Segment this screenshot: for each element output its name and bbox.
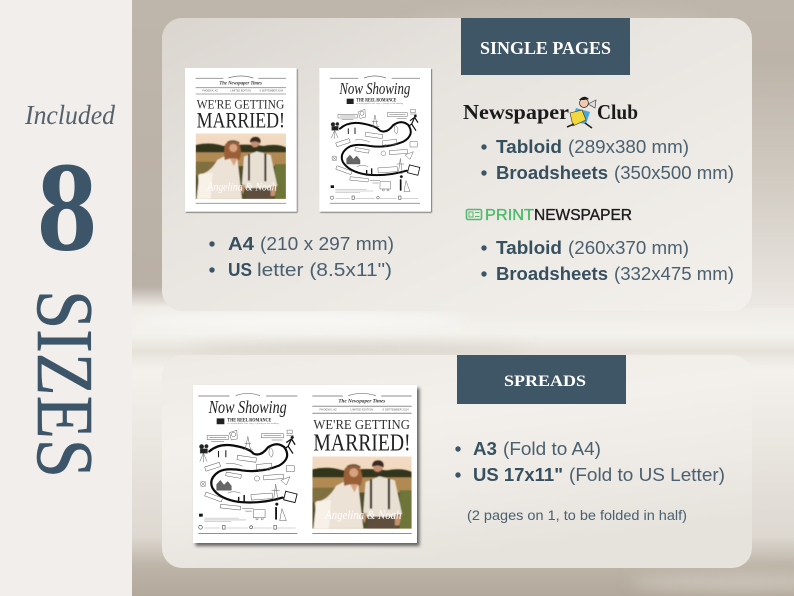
heading: spreads	[457, 355, 626, 404]
size list: newspaper club	[481, 136, 734, 183]
spread page: married front page: 9 SEPTEMBER 2024	[382, 408, 409, 412]
script heading: Included: Included	[24, 100, 115, 130]
logo: newspaper club: Newspaper	[463, 100, 569, 124]
spread page: now showing map: Now Showing	[208, 397, 287, 417]
left strip	[0, 0, 132, 596]
page: married front page: 9 SEPTEMBER 2024	[260, 90, 284, 93]
size list: letter formats: A4	[228, 233, 255, 254]
logo: newspaper club: Club	[597, 100, 638, 124]
size list: letter formats: (210 x 297 mm)	[260, 233, 394, 254]
size list: spreads: (Fold to A4)	[503, 438, 601, 459]
page: now showing map: an unforgettable love story, a journey to the wedding	[356, 102, 403, 105]
spread page: now showing map	[198, 393, 297, 533]
size list: spreads: A3	[473, 438, 497, 459]
size list: spreads: US 17x11"	[473, 464, 563, 485]
spread page: now showing map: an unforgettable love story, a journey to the wedding	[227, 422, 279, 425]
size list: newspaper club: Broadsheets	[496, 162, 608, 183]
spread page: married front page: PHOENIX, AZ	[319, 408, 337, 412]
background right margin	[745, 0, 794, 308]
spread page: married front page: Angelina & Noah	[324, 508, 401, 522]
size list: spreads: (Fold to US Letter)	[569, 464, 725, 485]
logo: print newspaper: NEWSPAPER	[534, 207, 632, 224]
size list: newspaper club: (289x380 mm)	[568, 136, 689, 157]
spread page: married front page: LIMITED EDITION	[350, 408, 373, 412]
page: married front page: LIMITED EDITION	[230, 90, 251, 93]
page: now showing map: THE REEL ROMANCE	[356, 99, 397, 104]
size list: print newspaper: Tabloid	[496, 237, 562, 258]
size list: letter formats	[209, 233, 394, 280]
spread page: married front page	[312, 393, 412, 533]
spread page: married front page: WE'RE GETTING	[313, 417, 410, 432]
page: married front page	[185, 68, 297, 212]
panel: spreads	[162, 355, 752, 568]
spread page: married front page: MARRIED!	[313, 429, 411, 456]
spread sheet	[193, 385, 417, 543]
note: fold instruction: (2 pages on 1, to be folded in half)	[467, 507, 687, 523]
spread page: now showing map: THE REEL ROMANCE	[227, 418, 272, 424]
logo: newspaper club	[463, 97, 638, 128]
heading: single pages	[461, 18, 630, 75]
page: married front page: The Newspaper Times	[219, 81, 262, 86]
page: married front page: Angelina & Noah	[206, 180, 277, 193]
size list: print newspaper: (260x370 mm)	[568, 237, 689, 258]
page: now showing map	[319, 68, 431, 212]
panel: single pages	[162, 18, 752, 311]
heading: spreads: SPREADS	[504, 373, 586, 390]
size list: print newspaper: (332x475 mm)	[614, 263, 734, 284]
spread page: married front page: The Newspaper Times	[338, 399, 385, 405]
big number 8: 8	[37, 136, 97, 278]
logo: print newspaper	[466, 207, 632, 224]
page: married front page: PHOENIX, AZ	[202, 90, 218, 93]
size list: letter formats: letter (8.5x11")	[257, 259, 392, 280]
page: married front page: WE'RE GETTING	[197, 97, 284, 111]
size list: newspaper club: Tabloid	[496, 136, 562, 157]
page: married front page: MARRIED!	[197, 108, 285, 133]
page: now showing map: Now Showing	[339, 79, 410, 98]
size list: print newspaper	[481, 237, 734, 284]
rotated word SIZES: SIZES	[20, 290, 108, 478]
logo: print newspaper: PRINT	[485, 207, 535, 224]
heading: single pages: SINGLE PAGES	[480, 38, 611, 58]
size list: print newspaper: Broadsheets	[496, 263, 608, 284]
size list: newspaper club: (350x500 mm)	[614, 162, 734, 183]
size list: letter formats: US	[228, 259, 252, 280]
size list: spreads	[455, 438, 725, 485]
